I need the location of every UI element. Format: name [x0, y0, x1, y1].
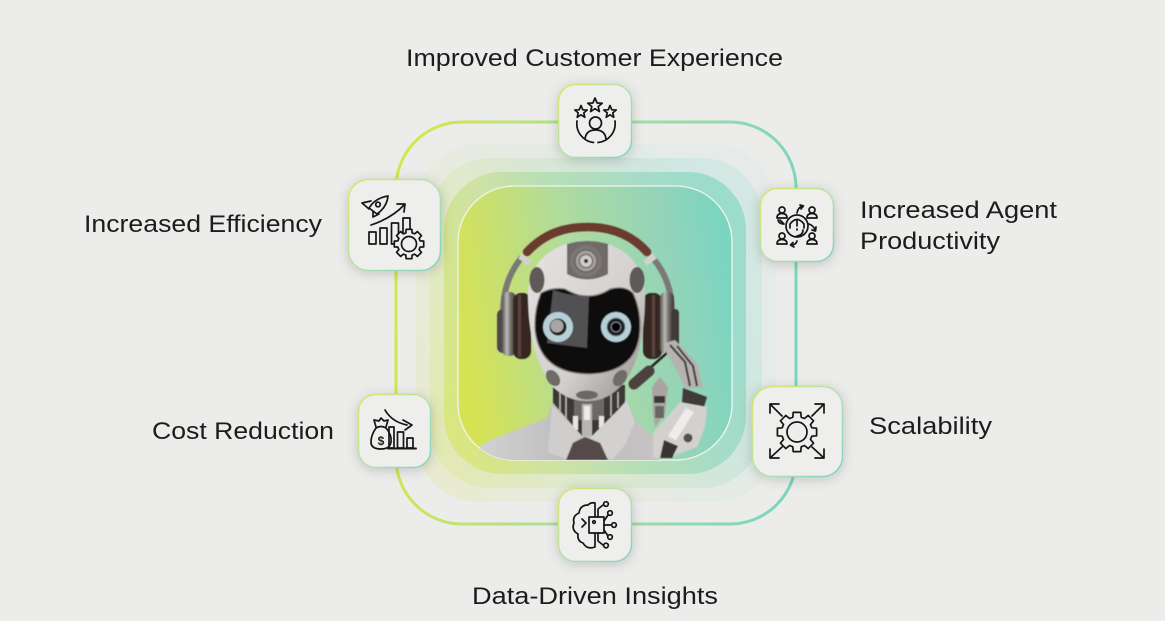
card: Data-Driven Insights	[558, 488, 632, 562]
collar	[548, 405, 582, 460]
label: Increased Agent Productivity: Increased Agent	[860, 197, 1057, 224]
label: Increased Efficiency: Increased Efficiency	[84, 211, 322, 238]
side vents	[530, 267, 544, 293]
icon: agent with team	[777, 205, 817, 247]
icon: brain and circuit	[573, 502, 616, 548]
visor	[535, 288, 640, 374]
card: Improved Customer Experience	[558, 84, 632, 158]
headband	[527, 227, 647, 252]
left ear cup	[497, 292, 531, 359]
dollar sign: $	[378, 434, 385, 448]
robot illustration	[480, 227, 707, 462]
right eye	[601, 312, 631, 342]
icon: gear with expanding arrows	[770, 404, 824, 458]
central panel: gradient	[458, 186, 732, 460]
helmet	[528, 241, 645, 401]
card: Cost Reduction	[358, 394, 430, 468]
shirt	[480, 400, 660, 462]
speaker	[570, 245, 602, 277]
icon: stars and customer	[575, 98, 616, 142]
forehead plate	[567, 241, 608, 280]
label: Improved Customer Experience: Improved Customer Experience	[406, 45, 783, 72]
neck	[553, 385, 625, 436]
icon: rocket, bars and gear	[362, 196, 424, 259]
glow layers	[416, 144, 776, 502]
robot hand	[652, 340, 707, 458]
right ear cup	[643, 292, 679, 359]
outer ring connector	[396, 122, 796, 524]
label: Cost Reduction: Cost Reduction	[152, 418, 334, 445]
label: Increased Agent Productivity: Productivity	[860, 228, 1000, 255]
card: Scalability	[752, 386, 842, 476]
label: Data-Driven Insights: Data-Driven Insights	[472, 583, 718, 610]
card: Increased Agent Productivity	[760, 188, 834, 262]
label: Scalability: Scalability	[869, 413, 992, 440]
chin	[576, 390, 598, 400]
microphone	[634, 352, 668, 384]
left eye	[543, 312, 573, 342]
tie	[566, 437, 608, 460]
card: Increased Efficiency	[348, 180, 440, 270]
icon: money bag and falling bars	[371, 410, 416, 449]
visor reflection	[547, 290, 589, 348]
